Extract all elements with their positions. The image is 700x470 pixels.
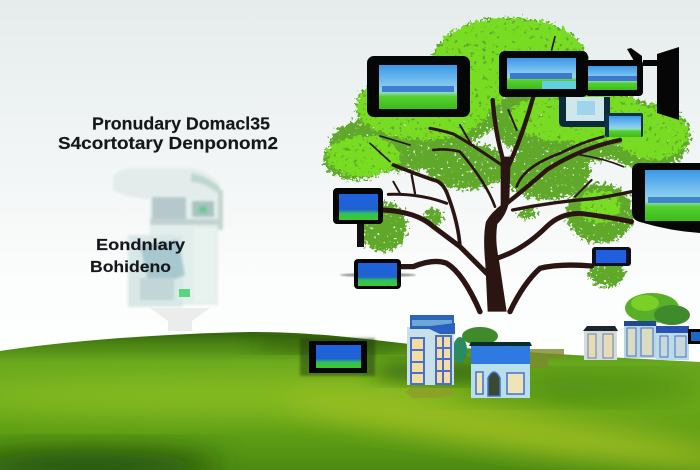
icon: black speaker mount bbox=[627, 47, 679, 120]
monitor: left with stem bbox=[333, 188, 383, 247]
monitor: large right bbox=[632, 163, 700, 233]
monitor: hanging light screen bbox=[559, 97, 610, 127]
bush and tree on far right houses bbox=[625, 293, 690, 325]
heading: secondary domain: S4cortotary Denponom2 bbox=[58, 133, 278, 153]
label: boundary: Eondnlary bbox=[96, 237, 185, 254]
monitor: on ground bbox=[300, 338, 375, 376]
monitor: top centre bbox=[499, 51, 588, 97]
house: tall blue bbox=[406, 315, 455, 398]
foliage bbox=[323, 18, 690, 287]
heading: primary domain: Pronudary Domacl35 bbox=[92, 114, 270, 134]
monitor: small under top right bbox=[605, 113, 643, 137]
hill bbox=[0, 332, 700, 470]
house: far small grey bbox=[583, 326, 618, 360]
label: bohideno: Bohideno bbox=[90, 259, 171, 276]
trunk and branches bbox=[370, 37, 632, 312]
faded machine illustration bbox=[113, 168, 223, 331]
house: far right pair bbox=[624, 321, 689, 360]
monitor: top right bbox=[585, 60, 643, 96]
monitor: large top left bbox=[367, 56, 470, 117]
house: centre with arched door bbox=[469, 342, 564, 398]
bush behind centre house bbox=[453, 327, 498, 363]
monitor: cropped far right bbox=[688, 329, 700, 344]
monitor: lower left bbox=[340, 259, 416, 289]
tree bbox=[323, 18, 690, 312]
monitor: lower right bbox=[592, 247, 631, 266]
